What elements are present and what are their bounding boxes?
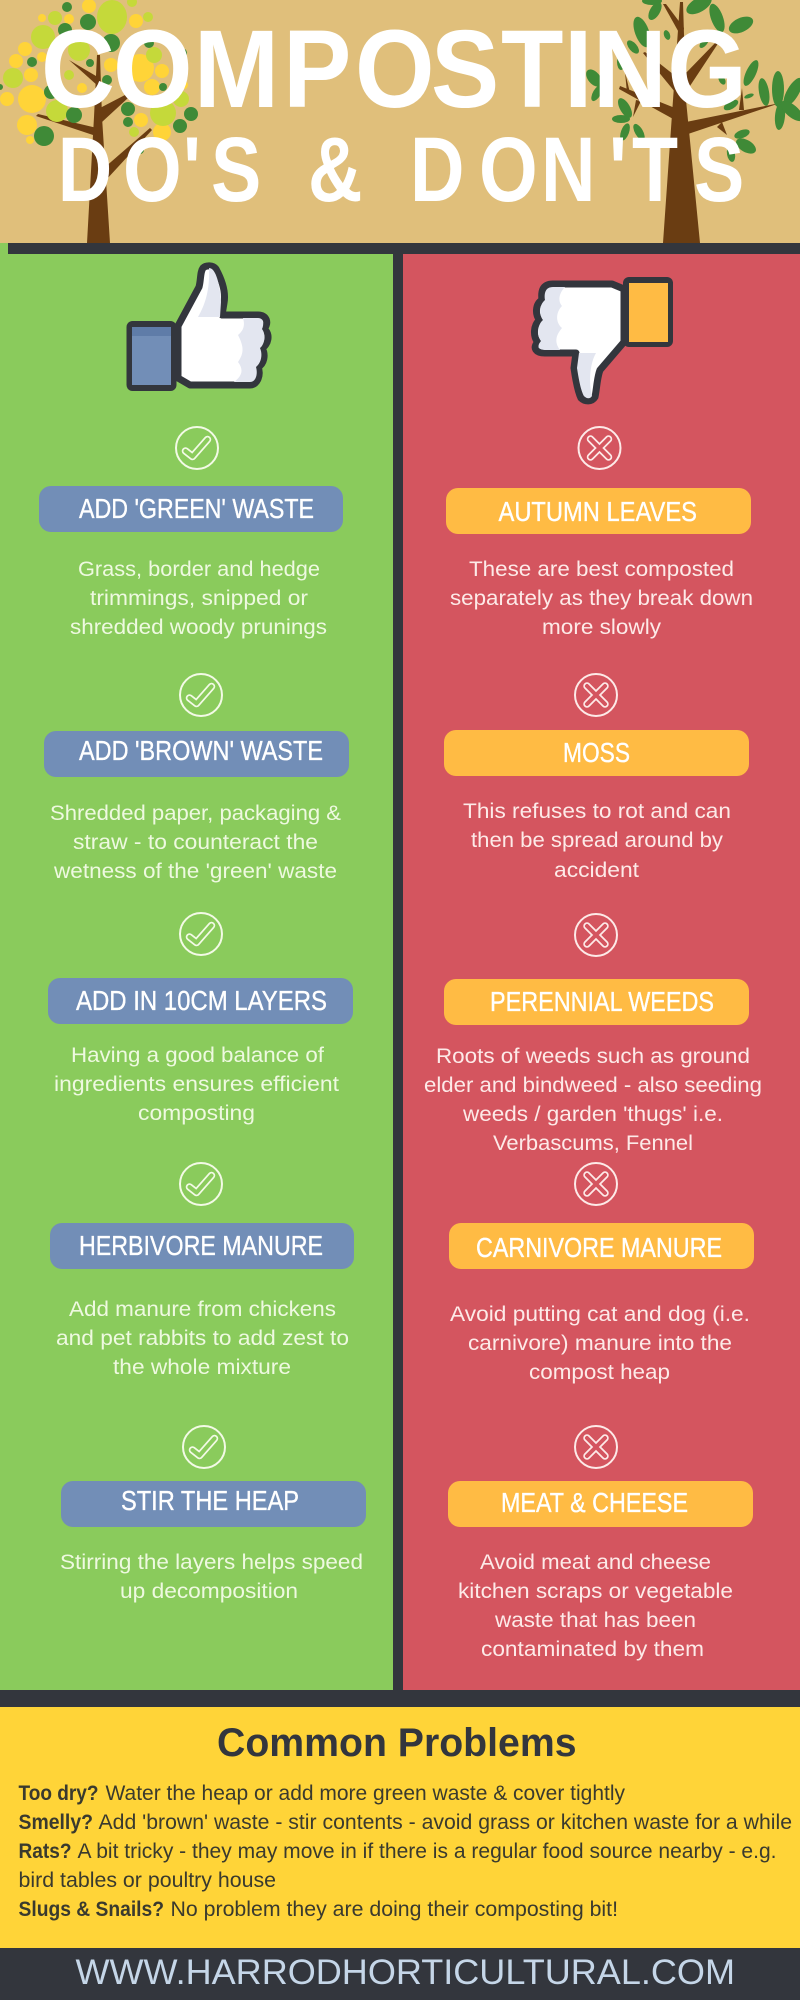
icon: check: [180, 1163, 222, 1205]
icon: check: [176, 427, 218, 469]
panel: do item 2: [44, 674, 349, 883]
panel: do item 5: [60, 1426, 366, 1603]
text: meat and cheese: Avoid meat and cheese: [480, 1551, 711, 1574]
label: perennial weeds: [444, 979, 749, 1025]
label: herbivore manure: [50, 1223, 354, 1269]
text: website: WWW.HARRODHORTICULTURAL.COM: [76, 1953, 735, 1992]
text: carnivore manure: [450, 1303, 750, 1384]
text: moss: [463, 800, 731, 882]
icon: thumbs down: [534, 277, 673, 401]
text: stir the heap: Stirring the layers helps speed: [60, 1551, 363, 1574]
icon: check: [180, 913, 222, 955]
icon: check: [180, 674, 222, 716]
panel: don't item 4: [449, 1163, 754, 1384]
text: carnivore manure: compost heap: [529, 1361, 670, 1384]
label: meat and cheese: MEAT & CHEESE: [501, 1487, 688, 1518]
text: add in 10cm layers: ingredients ensures efficient: [54, 1073, 339, 1096]
text: carnivore manure: carnivore) manure into the: [468, 1332, 732, 1355]
panel: don'ts column background: [403, 254, 800, 1690]
label: stir the heap: [61, 1481, 366, 1527]
text: stir the heap: up decomposition: [120, 1580, 298, 1603]
label: add green waste: ADD 'GREEN' WASTE: [79, 493, 314, 524]
text: add brown waste: [50, 802, 341, 883]
text: problem list: Rats?: [18, 1840, 72, 1863]
panel: don't item 2: [444, 674, 749, 882]
text: herbivore manure: and pet rabbits to add zest to: [56, 1327, 349, 1350]
heading: common problems: Common Problems: [217, 1721, 576, 1765]
label: add brown waste: ADD 'BROWN' WASTE: [79, 735, 323, 766]
text: perennial weeds: elder and bindweed - also seeding: [424, 1074, 762, 1097]
text: herbivore manure: the whole mixture: [113, 1356, 291, 1379]
icon: thumbs up: [126, 266, 268, 391]
icon: cross: [575, 914, 617, 956]
label: perennial weeds: PERENNIAL WEEDS: [490, 986, 714, 1017]
text: perennial weeds: weeds / garden 'thugs' i.e.: [462, 1103, 723, 1126]
panel: common problems: [0, 1707, 800, 1948]
title: DO'S & DON'TS: [58, 118, 744, 221]
text: problem list: Too dry?: [18, 1782, 98, 1805]
text: add brown waste: straw - to counteract the: [73, 831, 318, 854]
text: add brown waste: Shredded paper, packaging &: [50, 802, 341, 825]
label: stir the heap: STIR THE HEAP: [121, 1485, 299, 1516]
text: moss: This refuses to rot and can: [463, 800, 731, 823]
text: perennial weeds: [424, 1045, 762, 1155]
icon: cross: [578, 427, 620, 469]
text: problem list: Add 'brown' waste - stir contents - avoid grass or kitchen waste for a while: [98, 1811, 792, 1834]
text: add brown waste: wetness of the 'green' waste: [53, 860, 337, 883]
label: meat and cheese: [448, 1481, 753, 1527]
text: problem list: Water the heap or add more green waste & cover tightly: [106, 1782, 625, 1805]
label: autumn leaves: AUTUMN LEAVES: [498, 496, 697, 527]
panel: footer: [0, 1948, 800, 2000]
text: add in 10cm layers: Having a good balance of: [71, 1044, 324, 1067]
panel: do item 3: [48, 913, 353, 1125]
text: meat and cheese: waste that has been: [494, 1609, 696, 1632]
text: add in 10cm layers: composting: [138, 1102, 255, 1125]
panel: do item 1: [39, 427, 343, 639]
title: COMPOSTING: [41, 8, 747, 131]
label: autumn leaves: [446, 488, 751, 534]
label: add in 10cm layers: [48, 978, 353, 1024]
icon: cross: [575, 1426, 617, 1468]
text: problem list: A bit tricky - they may move in if there is a regular food source nearby - e.g.: [78, 1840, 776, 1863]
text: herbivore manure: [56, 1298, 349, 1379]
text: perennial weeds: Roots of weeds such as ground: [436, 1045, 750, 1068]
panel: do's column background: [0, 243, 393, 1690]
bottom divider bar: [0, 1690, 800, 1707]
panel: don't item 3: [424, 914, 762, 1155]
text: herbivore manure: Add manure from chickens: [69, 1298, 336, 1321]
text: autumn leaves: These are best composted: [469, 558, 734, 581]
label: carnivore manure: [449, 1223, 754, 1269]
text: meat and cheese: kitchen scraps or vegetable: [458, 1580, 733, 1603]
text: problem list: [18, 1782, 792, 1921]
text: moss: accident: [554, 859, 639, 882]
text: add green waste: trimmings, snipped or: [90, 587, 308, 610]
icon: cross: [575, 674, 617, 716]
text: add in 10cm layers: [54, 1044, 339, 1125]
text: problem list: Smelly?: [18, 1811, 93, 1834]
text: carnivore manure: Avoid putting cat and dog (i.e.: [450, 1303, 750, 1326]
icon: cross: [575, 1163, 617, 1205]
label: herbivore manure: HERBIVORE MANURE: [79, 1230, 323, 1261]
text: add green waste: [70, 558, 327, 639]
icon: left tree: [0, 0, 198, 243]
text: meat and cheese: contaminated by them: [481, 1638, 704, 1661]
label: add in 10cm layers: ADD IN 10CM LAYERS: [76, 985, 327, 1016]
text: autumn leaves: more slowly: [542, 616, 662, 639]
panel: don't item 1: [446, 427, 753, 639]
text: problem list: No problem they are doing their composting bit!: [170, 1898, 618, 1921]
icon: check: [183, 1426, 225, 1468]
text: problem list: Slugs & Snails?: [18, 1898, 164, 1921]
label: carnivore manure: CARNIVORE MANURE: [476, 1232, 722, 1263]
text: add green waste: Grass, border and hedge: [78, 558, 320, 581]
text: meat and cheese: [458, 1551, 733, 1661]
panel: don't item 5: [448, 1426, 753, 1661]
text: problem list: bird tables or poultry house: [18, 1869, 276, 1892]
label: add green waste: [39, 486, 343, 532]
center divider: [393, 243, 403, 1693]
top divider bar: [8, 243, 800, 254]
panel: header: [0, 0, 800, 244]
icon: right tree: [583, 0, 800, 243]
panel: do item 4: [50, 1163, 354, 1379]
title: [41, 8, 747, 221]
text: moss: then be spread around by: [471, 829, 724, 852]
text: add green waste: shredded woody prunings: [70, 616, 327, 639]
label: add brown waste: [44, 731, 349, 777]
label: moss: [444, 730, 749, 776]
text: stir the heap: [60, 1551, 363, 1603]
text: autumn leaves: [450, 558, 753, 639]
label: moss: MOSS: [563, 737, 630, 768]
text: autumn leaves: separately as they break down: [450, 587, 753, 610]
text: perennial weeds: Verbascums, Fennel: [493, 1132, 693, 1155]
